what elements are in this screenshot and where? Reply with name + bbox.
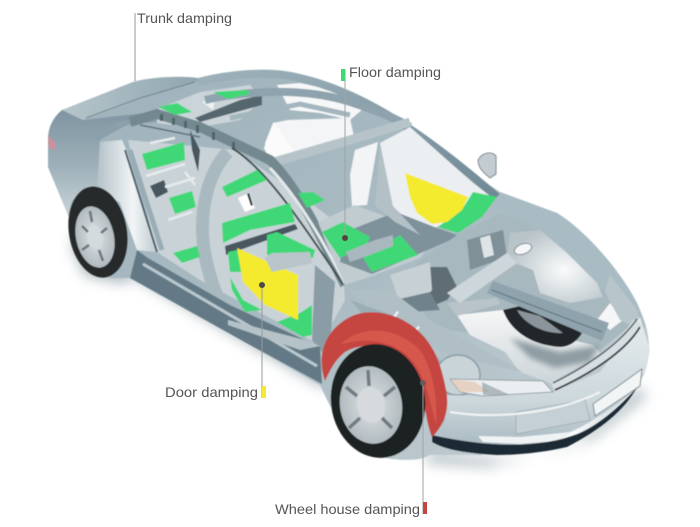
floor pedal bracket <box>346 235 393 262</box>
label: wheel house damping: Wheel house damping <box>275 501 420 517</box>
label: floor damping: Floor damping <box>349 64 441 80</box>
rear interior details <box>150 130 298 255</box>
cowl <box>340 212 460 274</box>
cross beam <box>487 281 609 341</box>
label: trunk damping <box>135 10 232 81</box>
side frame <box>605 275 642 330</box>
area behind strut <box>467 230 507 270</box>
front spoiler <box>432 387 637 455</box>
A pillar base <box>312 265 335 352</box>
engine block <box>430 267 457 307</box>
front wheel <box>324 338 432 464</box>
rear quarter panel <box>48 110 153 215</box>
rear wheel <box>61 182 135 282</box>
C pillar <box>125 150 157 252</box>
ground seen through engine bay <box>457 310 600 383</box>
door mirror inner <box>265 252 312 272</box>
door mirror outer <box>478 153 496 178</box>
trunk lid <box>62 77 203 120</box>
roof rail second <box>205 92 410 127</box>
upper member <box>447 253 517 303</box>
grille stripes <box>553 322 638 387</box>
strut tower <box>507 230 603 303</box>
rear door arch <box>97 120 157 140</box>
rear shelf <box>150 85 262 128</box>
roof rail outer <box>198 74 497 197</box>
label: wheel house damping <box>275 380 427 517</box>
engine bay <box>400 213 637 350</box>
door opening frame <box>228 320 320 350</box>
licence plate <box>593 369 642 416</box>
far front wheel <box>503 306 582 347</box>
lower arm <box>447 298 500 316</box>
rear fender <box>97 140 163 253</box>
car body base <box>48 72 650 464</box>
rear tail light <box>48 136 55 150</box>
bumper intake <box>516 400 590 434</box>
sill <box>130 250 322 384</box>
floor damping patches <box>142 90 497 337</box>
door damping patches <box>237 173 468 320</box>
roof opening <box>277 83 370 120</box>
label: door damping: Door damping <box>165 384 258 400</box>
rear side window <box>265 118 354 162</box>
label: trunk damping: Trunk damping <box>137 10 232 26</box>
bumper <box>432 317 650 455</box>
hood rail <box>498 192 647 330</box>
floor panel front <box>318 205 440 285</box>
front fender rail <box>350 290 523 372</box>
gap beside bumper frame <box>597 303 623 330</box>
windshield window <box>380 127 490 232</box>
headlight <box>450 379 553 396</box>
label: floor damping <box>341 64 441 241</box>
roof side beam <box>130 114 345 285</box>
label: door damping <box>165 282 266 400</box>
front side window <box>350 142 378 206</box>
wheel house damping <box>322 312 447 437</box>
fog strip <box>478 432 572 444</box>
B pillar <box>202 152 228 322</box>
C window <box>264 122 298 160</box>
interior cabin floor <box>128 140 345 345</box>
windshield header <box>267 122 410 164</box>
ground shadow <box>70 240 646 466</box>
headlight housing <box>436 355 480 395</box>
